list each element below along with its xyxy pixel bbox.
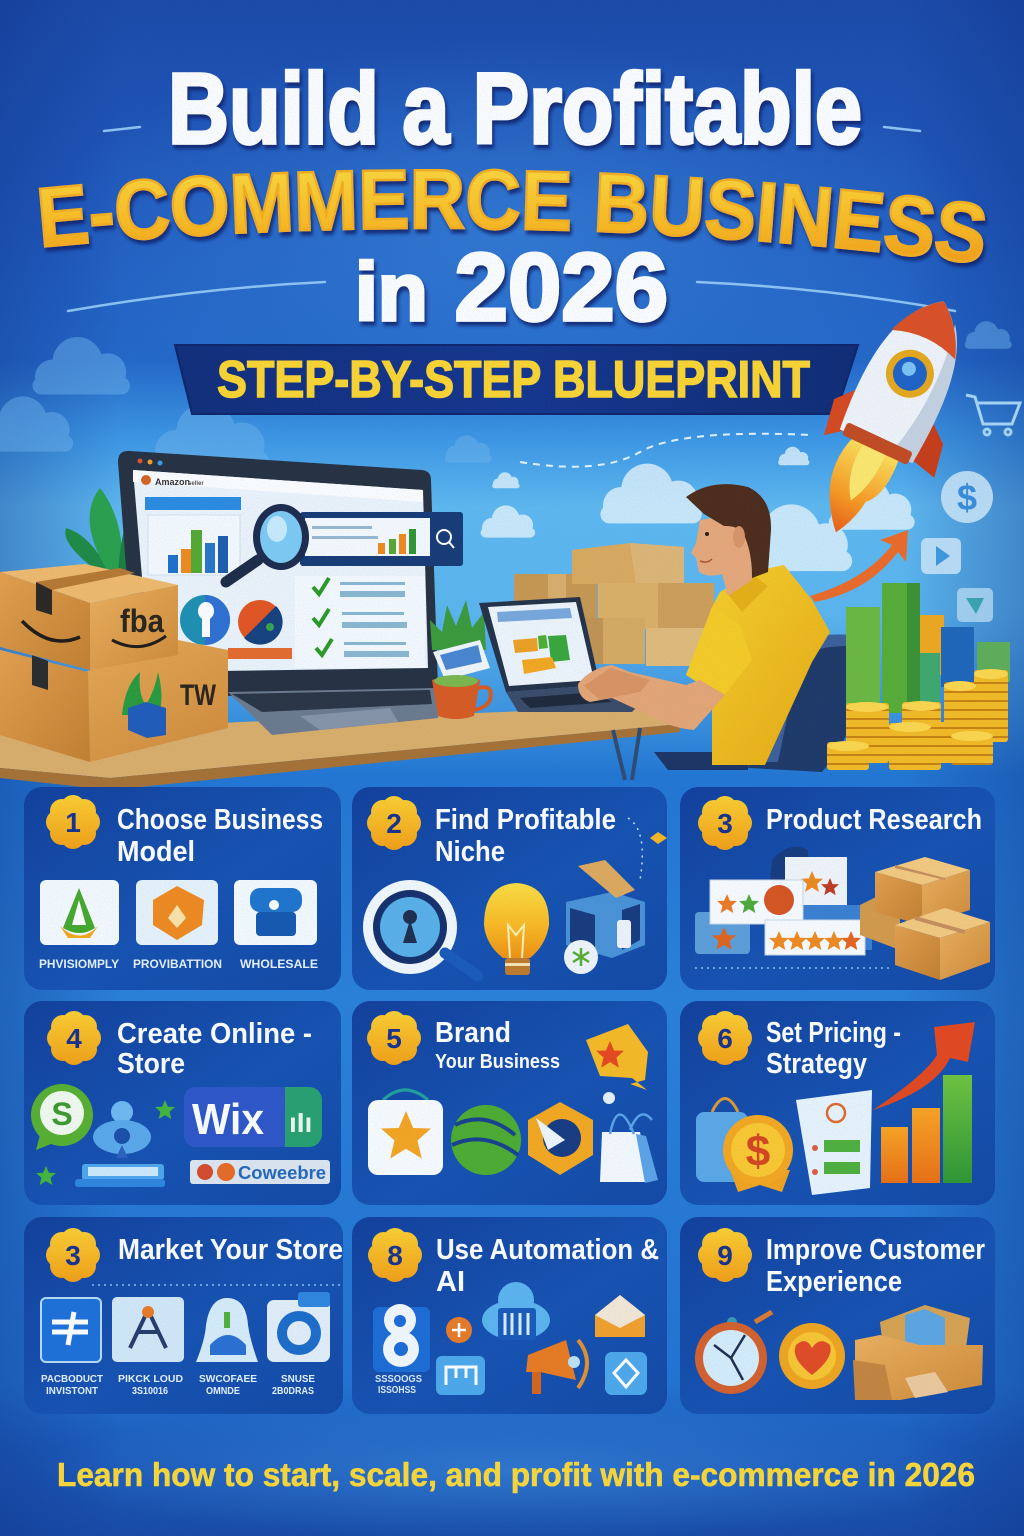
icon: light bulb <box>484 883 549 975</box>
icon: plus <box>446 1317 472 1343</box>
icon: niche magnifier <box>363 880 478 976</box>
tiles: marketing <box>41 1292 330 1362</box>
badge 2: 2 <box>386 808 402 839</box>
heading 6: Strategy <box>766 1048 867 1080</box>
icon: shopping bag <box>600 1092 658 1183</box>
icon: stopwatch <box>695 1312 772 1394</box>
icon: dollar coin <box>723 1115 793 1192</box>
badge 5: 5 <box>386 1023 402 1054</box>
badge 6 <box>698 1011 752 1065</box>
icon: message bubble <box>957 588 993 622</box>
icon: leaf tile <box>605 1352 647 1395</box>
badge 6: 6 <box>717 1023 733 1054</box>
icon: chat bubble: S <box>51 1096 73 1132</box>
heading 6: Set Pricing - <box>766 1017 901 1049</box>
tile labels: 3S10016 <box>132 1386 168 1397</box>
badge 9: 9 <box>717 1240 733 1271</box>
icon: megaphone <box>526 1340 587 1394</box>
badge 1 <box>46 795 100 849</box>
icon: play bubble <box>921 538 961 574</box>
badge 1: 1 <box>65 807 81 838</box>
tile labels: PIKCK LOUD <box>118 1374 183 1385</box>
heading 8: Use Automation & <box>436 1234 659 1266</box>
panel: step 8 <box>352 1217 667 1414</box>
green bar chart books <box>846 583 1010 713</box>
tile labels <box>375 1374 422 1396</box>
heading 9: Experience <box>766 1266 902 1298</box>
heading 4: Store <box>117 1048 185 1080</box>
tile labels: SNUSE <box>281 1374 315 1385</box>
panel: step 9 <box>680 1217 995 1414</box>
badge 3: 3 <box>717 808 733 839</box>
icon: star tag <box>586 1024 648 1090</box>
badge 8 <box>368 1228 422 1282</box>
boxes: fba and branded: fba <box>120 603 164 639</box>
tile labels: SWCOFAEE <box>199 1374 257 1385</box>
icon: red arrow <box>873 1022 975 1110</box>
big laptop with dashboard: Amazon <box>155 477 190 487</box>
banner: STEP-BY-STEP BLUEPRINT <box>217 351 810 409</box>
icon: shop counter <box>75 1164 165 1187</box>
tiles: business models <box>40 880 317 945</box>
icon: magnifying glass <box>226 504 309 582</box>
search bar <box>300 512 463 566</box>
icon: dollar coin: $ <box>746 1127 770 1176</box>
boxes: fba and branded <box>0 564 228 762</box>
tile labels: SSSOOGS <box>375 1374 422 1385</box>
stacked cartons <box>514 543 714 666</box>
icon: Wix tile <box>184 1087 322 1147</box>
heading 5: Your Business <box>435 1051 560 1073</box>
icon: heart coin <box>779 1323 845 1389</box>
badge 5 <box>367 1011 421 1065</box>
heading 4: Create Online - <box>117 1018 312 1050</box>
heading 2: Niche <box>435 836 505 868</box>
coffee mug <box>432 675 491 719</box>
panel: step 1 <box>24 787 341 990</box>
growth arrow <box>810 530 908 602</box>
panel: step 2 <box>352 787 667 990</box>
tile labels: INVISTONT <box>46 1386 98 1397</box>
icon: Coweebre tile: Coweebre <box>238 1163 326 1183</box>
gold coin stacks <box>827 669 1008 770</box>
panel: step 3 <box>680 787 995 990</box>
heading 1: Choose Business <box>117 804 323 836</box>
dotted accent <box>628 818 667 880</box>
tile labels: PROVIBATTION <box>133 957 222 971</box>
heading 3: Product Research <box>766 804 982 836</box>
title accent lines <box>68 127 955 311</box>
small plant and card <box>430 600 490 680</box>
tile labels: ISSOHSS <box>378 1385 416 1396</box>
badge 7: 3 <box>65 1240 81 1271</box>
bar chart: growth <box>881 1075 972 1183</box>
heading 5: Brand <box>435 1017 511 1049</box>
title: line 1: Build a Profitable <box>168 53 862 165</box>
big laptop with dashboard <box>118 451 438 735</box>
boxes: fba and branded: TW <box>180 679 217 712</box>
person at desk <box>578 484 830 765</box>
icon: hexagon <box>528 1102 593 1175</box>
icon: dollar circle: $ <box>957 477 977 518</box>
icon: product box <box>564 860 645 974</box>
icon: review cards <box>695 847 872 955</box>
badge 4: 4 <box>66 1023 82 1054</box>
icon: chat bubble <box>31 1084 93 1150</box>
badge 4 <box>47 1011 101 1065</box>
icon: price document <box>796 1090 872 1195</box>
icon: blue clipboard <box>696 1098 748 1182</box>
small laptop <box>479 597 640 712</box>
desk <box>0 706 680 790</box>
heading 9: Improve Customer <box>766 1234 985 1266</box>
icon: green globe <box>451 1105 521 1175</box>
tile labels: PACBODUCT <box>41 1374 103 1385</box>
panel: step 5 <box>352 1001 667 1205</box>
dotted rule <box>92 1284 340 1286</box>
panel: step 7 <box>24 1217 343 1414</box>
title: line 3: in 2026 <box>355 234 668 341</box>
icon: Wix tile: ıIı <box>289 1107 312 1138</box>
badge 9 <box>698 1228 752 1282</box>
heading 8: AI <box>436 1266 465 1298</box>
icon: parcels <box>853 1305 983 1400</box>
tile labels: 2B0DRAS <box>272 1386 314 1397</box>
panel: step 6 <box>680 1001 995 1205</box>
badge 8: 8 <box>387 1240 403 1271</box>
tile labels: PHVISIOMPLY <box>39 957 119 971</box>
icon: star tile <box>368 1090 443 1175</box>
heading 2: Find Profitable <box>435 804 616 836</box>
heading 1: Model <box>117 836 195 868</box>
icon: rocket <box>783 277 1004 560</box>
tile labels <box>39 957 318 971</box>
icon: shopping cart <box>966 395 1020 435</box>
tile labels <box>41 1374 315 1397</box>
icon: envelope <box>595 1295 645 1337</box>
plant behind boxes <box>65 488 138 578</box>
scene: sky clouds <box>0 321 1012 571</box>
icon: blue 8 tile <box>373 1304 430 1372</box>
icon: cartons <box>860 857 990 980</box>
badge 2 <box>367 796 421 850</box>
icon: cloud <box>482 1282 550 1340</box>
icon: Wix tile: Wix <box>192 1095 264 1144</box>
icon: Coweebre tile <box>190 1160 330 1184</box>
icon: people <box>93 1101 151 1158</box>
icon: dollar circle <box>941 471 993 523</box>
big laptop with dashboard: seller <box>188 481 204 487</box>
badge 3 <box>698 796 752 850</box>
badge 7 <box>46 1228 100 1282</box>
tile labels: OMNDE <box>206 1386 240 1397</box>
footer tagline: Learn how to start, scale, and profit with e-commerce in 2026 <box>57 1456 975 1493</box>
title: line 2: E-COMMERCE BUSINESS <box>38 168 988 269</box>
tile labels: WHOLESALE <box>240 957 318 971</box>
heading 7: Market Your Store <box>118 1234 343 1266</box>
dotted accent <box>695 967 890 969</box>
panel: step 4 <box>24 1001 341 1205</box>
icon: green stars <box>36 1100 175 1185</box>
chair <box>654 635 870 772</box>
icon: window tile <box>436 1356 485 1395</box>
